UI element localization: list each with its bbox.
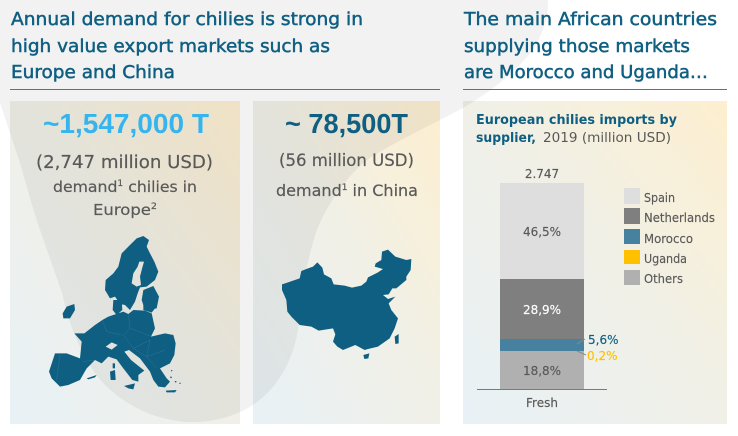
Europe value and description: 1 <box>117 179 123 189</box>
heading: African suppliers: supplying those markets <box>464 36 690 57</box>
heading: African suppliers <box>463 9 717 83</box>
heading: annual demand: Europe and China <box>11 62 175 83</box>
legend: Morocco <box>644 232 693 246</box>
Europe value and description: (2,747 million USD) <box>36 152 213 173</box>
stacked bar chart <box>477 167 618 410</box>
chart title: supplier, <box>476 131 536 146</box>
heading: African suppliers: The main African countries <box>463 9 717 30</box>
panel: China demand <box>253 101 440 424</box>
heading: annual demand: Annual demand for chilies is strong in <box>11 9 363 30</box>
China value and description: in China <box>347 181 418 200</box>
legend: Netherlands <box>644 211 715 225</box>
Europe tonnage: ~1,547,000 T <box>43 108 209 139</box>
China value and description: 1 <box>342 183 347 193</box>
Europe value and description: 2 <box>151 202 157 212</box>
stacked bar chart: 0,2% <box>587 349 618 363</box>
stacked bar chart: 2.747 <box>525 167 559 181</box>
stacked bar chart: 46,5% <box>523 225 561 239</box>
panel: imports chart <box>463 101 727 424</box>
heading: annual demand: high value export markets such as <box>11 36 330 57</box>
map: China <box>282 250 411 359</box>
chart title: 2019 (million USD) <box>543 131 671 146</box>
Europe value and description: Europe <box>93 201 148 219</box>
China value and description: (56 million USD) <box>279 151 414 171</box>
stacked bar chart: 5,6% <box>588 333 618 347</box>
chart title: European chilies imports by <box>476 113 678 128</box>
legend: Uganda <box>644 252 687 266</box>
legend <box>624 188 715 286</box>
China value and description: demand <box>276 181 342 200</box>
stacked bar chart: 28,9% <box>523 303 561 317</box>
heading: annual demand <box>11 9 363 83</box>
Europe value and description <box>36 152 213 219</box>
stacked bar chart: 18,8% <box>523 364 561 378</box>
Europe value and description: chilies in <box>123 178 197 196</box>
background blob <box>0 0 548 422</box>
heading: African suppliers: are Morocco and Uganda… <box>464 62 708 83</box>
stacked bar chart: Fresh <box>526 396 558 410</box>
legend: Spain <box>644 191 675 205</box>
chart title <box>476 113 678 146</box>
Europe value and description: demand <box>53 178 117 196</box>
China value and description <box>276 151 418 200</box>
legend: Others <box>644 272 683 286</box>
panel: Europe demand <box>10 101 240 424</box>
China tonnage: ~ 78,500T <box>285 108 408 139</box>
map: Europe <box>49 236 181 392</box>
